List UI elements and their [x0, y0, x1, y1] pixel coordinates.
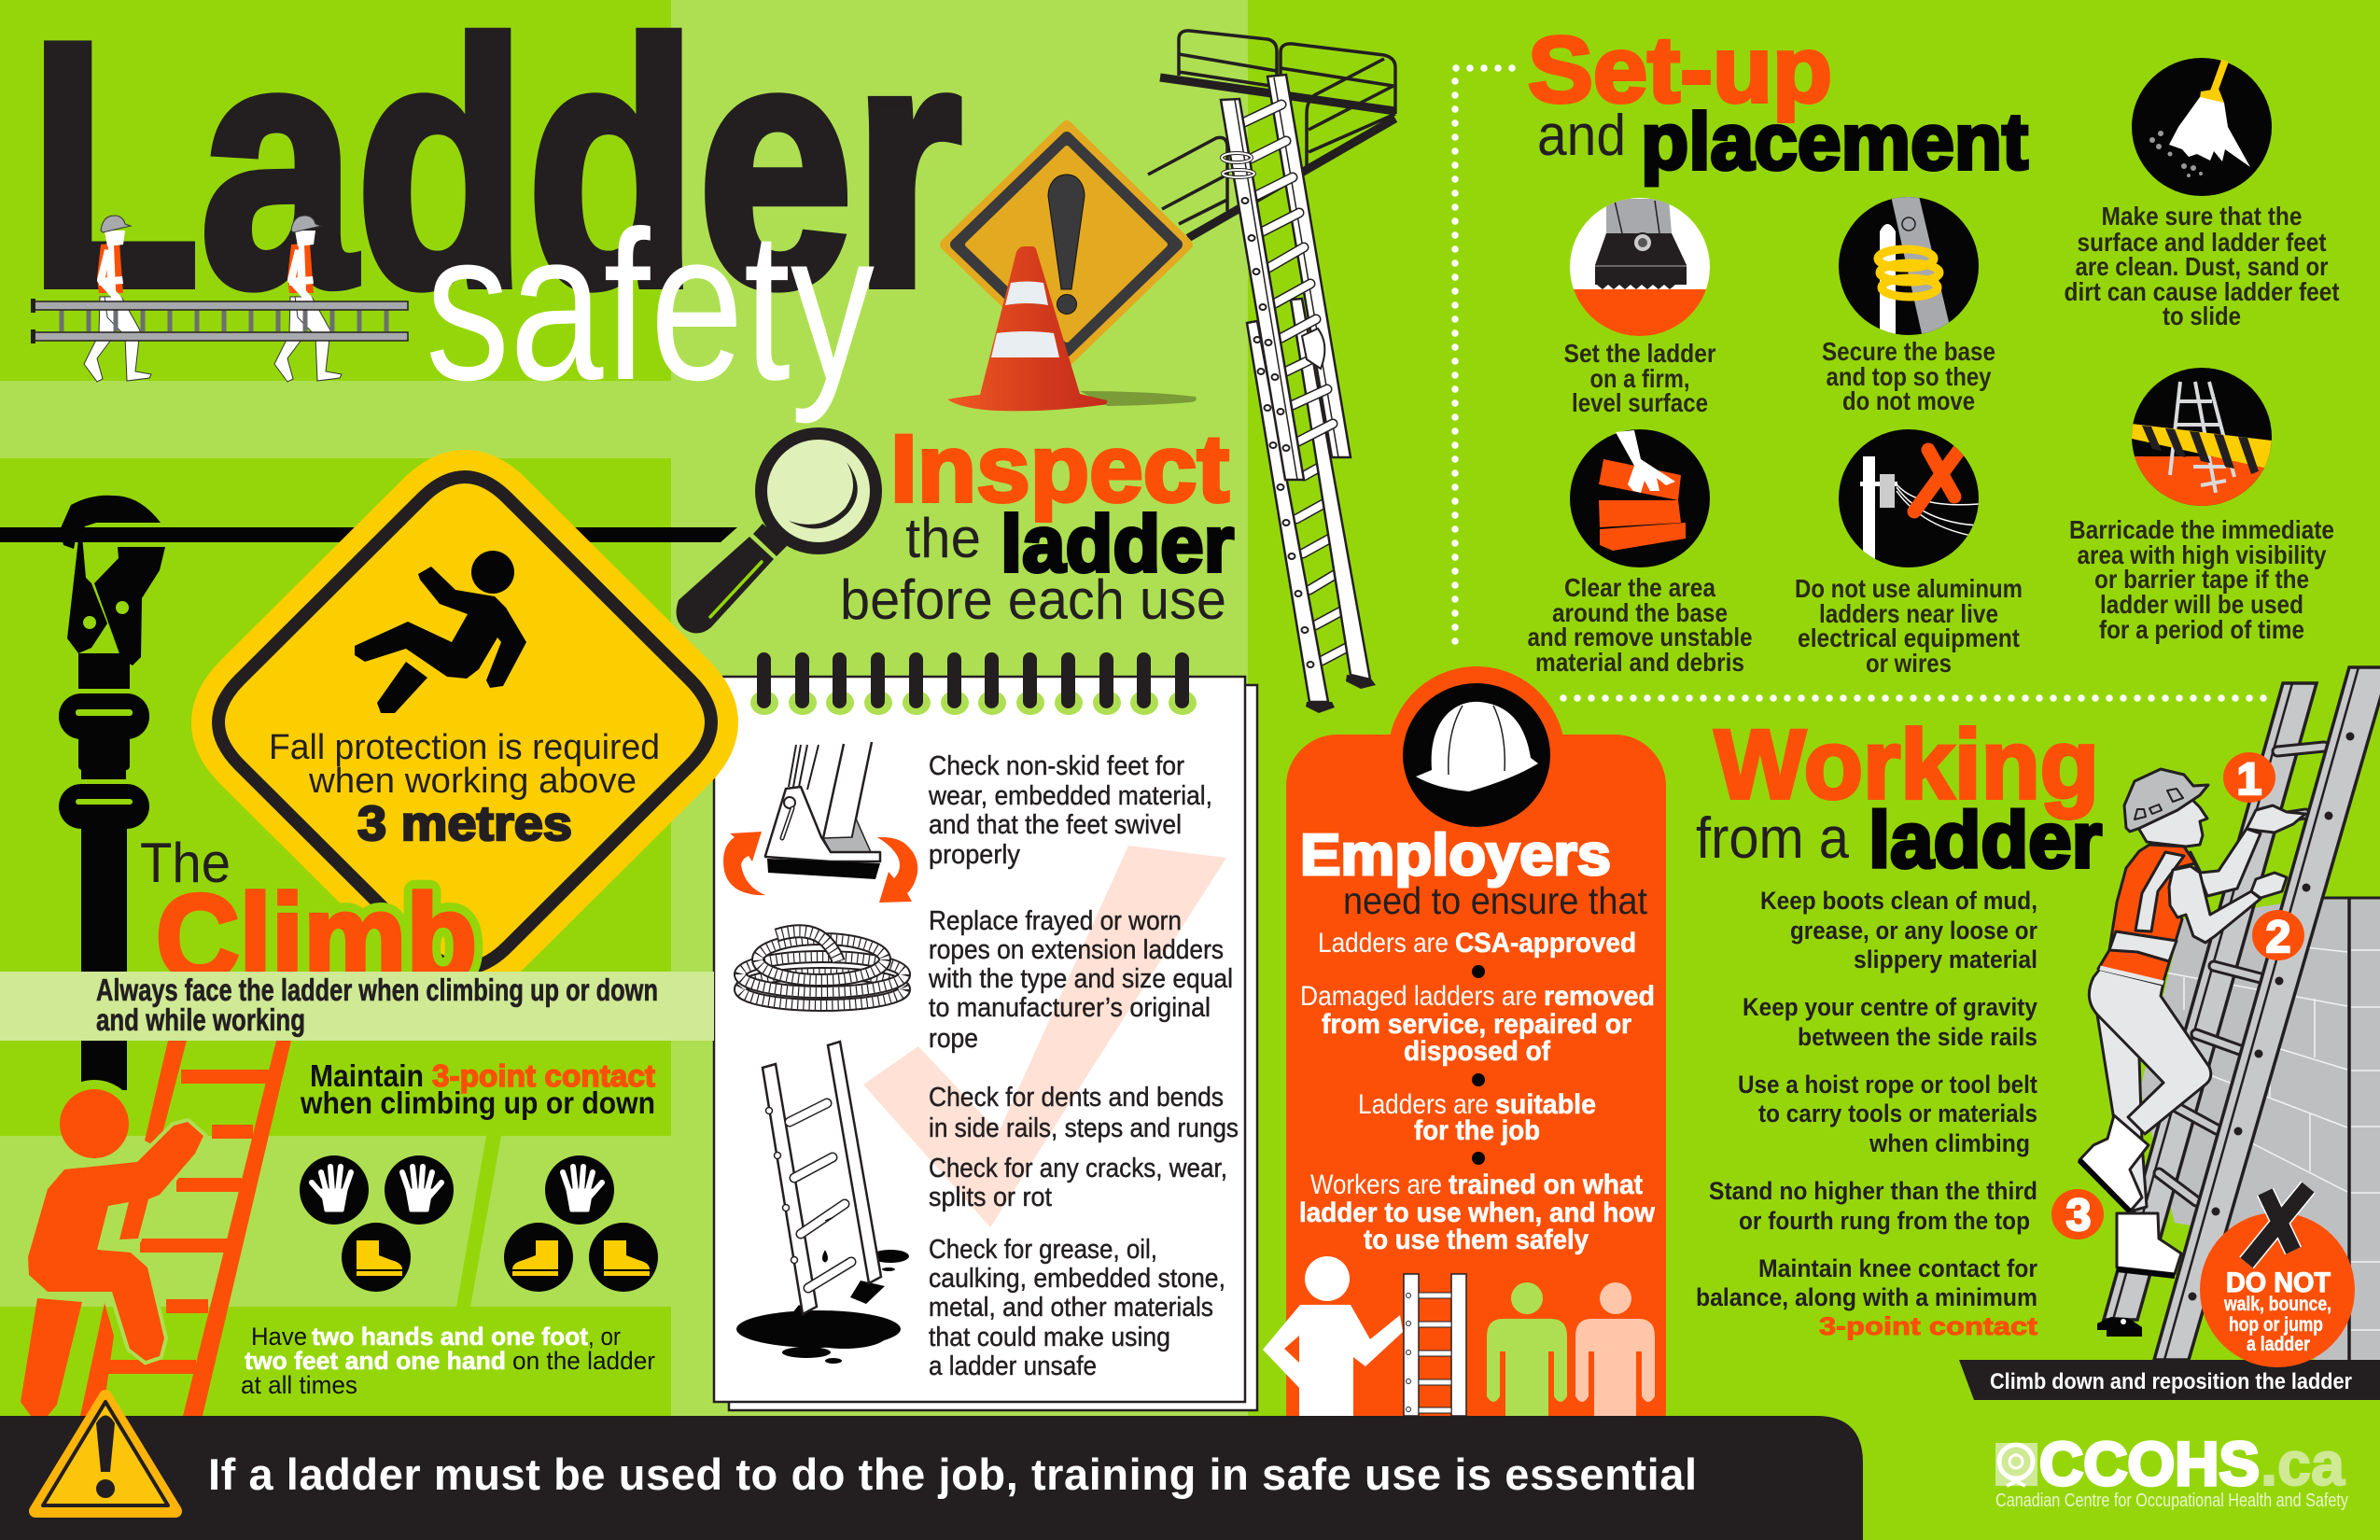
employers list: Ladders are — [1318, 928, 1449, 959]
traffic cone — [947, 246, 1197, 411]
icon: broom sweeping — [2132, 58, 2272, 196]
notebook text — [928, 751, 1239, 1381]
set-up instructions text: ladders near live — [1819, 599, 1998, 628]
heading: The Climb: Climb — [156, 869, 477, 1005]
working tips text — [1696, 887, 2037, 1340]
set-up instructions text — [1527, 202, 2339, 678]
employers list: ladder to use when, and how — [1299, 1197, 1656, 1228]
notebook text: ropes on extension ladders — [929, 935, 1224, 965]
icon: ladder in oil spill — [736, 1042, 909, 1364]
icon: no aluminum near wires — [1839, 429, 1979, 568]
heading: inspect the ladder: the — [905, 507, 981, 569]
illustration: worker climbing ladder — [2079, 667, 2380, 1360]
icon: orange climber on ladder — [21, 1041, 291, 1416]
set-up instructions text: Set the ladder — [1564, 339, 1716, 368]
warning diamond sign — [945, 126, 1187, 361]
set-up instructions text: are clean. Dust, sand or — [2076, 252, 2329, 281]
set-up instructions text: material and debris — [1535, 648, 1744, 677]
text: maintain 3-point contact: when climbing up or down — [300, 1085, 655, 1120]
heading: working from a ladder: ladder — [1869, 796, 2102, 884]
people with ladder — [1263, 1256, 1655, 1416]
set-up instructions text: for a period of time — [2099, 615, 2304, 644]
heading: employers: need to ensure that — [1343, 879, 1648, 922]
banner: climb down: Climb down and reposition the ladder — [1990, 1369, 2352, 1394]
heading: set-up and placement — [1528, 18, 2028, 187]
text: maintain 3-point contact: Maintain — [310, 1058, 424, 1093]
set-up instructions text: or wires — [1866, 649, 1952, 678]
set-up instructions text: Secure the base — [1822, 337, 1995, 366]
callout: do not: hop or jump — [2229, 1314, 2323, 1336]
band: always face the ladder — [0, 972, 714, 1041]
sign text: when working above — [308, 762, 637, 801]
set-up instructions text: dirt can cause ladder feet — [2065, 277, 2339, 306]
icon: hard hat — [1403, 683, 1550, 827]
notebook text: in side rails, steps and rungs — [929, 1113, 1239, 1143]
text: maintain 3-point contact: 3-point contact — [432, 1058, 655, 1093]
heading: working from a ladder: Working — [1715, 710, 2099, 819]
icon: clear the area — [1570, 429, 1710, 567]
text: two hands and one foot: , or — [588, 1323, 621, 1351]
dotted connector lines — [1455, 68, 2266, 698]
notebook spiral — [750, 652, 1197, 715]
callout: do not: walk, bounce, — [2223, 1294, 2331, 1315]
heading: The Climb: Climb — [156, 869, 477, 1005]
callout: do not — [2200, 1187, 2355, 1367]
set-up instructions text: Barricade the immediate — [2069, 515, 2334, 544]
harness hook and strap — [59, 496, 165, 1090]
employers list: suitable — [1495, 1089, 1596, 1120]
set-up instructions text: Do not use aluminum — [1795, 574, 2023, 603]
notebook text: and that the feet swivel — [929, 810, 1182, 840]
set-up instructions text: to slide — [2163, 301, 2241, 330]
notebook text: Check non-skid feet for — [929, 751, 1184, 781]
working tips text: balance, along with a minimum — [1696, 1283, 2037, 1311]
working tips text: Maintain knee contact for — [1758, 1254, 2037, 1282]
workers carrying ladder — [31, 216, 408, 382]
employers list: Workers are — [1310, 1169, 1442, 1200]
icon: barricade tape — [2132, 368, 2272, 506]
heading: The Climb: The — [140, 832, 231, 894]
set-up instructions text: electrical equipment — [1798, 623, 2020, 652]
magnifying glass — [677, 427, 882, 634]
notebook text: Check for grease, oil, — [929, 1235, 1157, 1265]
set-up instructions text: Make sure that the — [2102, 202, 2302, 231]
climb: panels — [0, 1136, 671, 1307]
set-up instructions text: surface and ladder feet — [2078, 228, 2326, 257]
employers list — [1299, 928, 1656, 1255]
extension ladder — [1221, 75, 1376, 713]
employers list: trained on what — [1449, 1169, 1643, 1200]
text: two hands and one foot: two feet and one hand — [245, 1347, 506, 1375]
notebook text: with the type and size equal — [928, 964, 1233, 994]
set-up instructions text: around the base — [1552, 598, 1728, 627]
employers list: CSA-approved — [1455, 928, 1636, 959]
banner text: If a ladder must be used to do the job, training in safe use is essential — [208, 1449, 1697, 1499]
set-up instructions text: area with high visibility — [2078, 540, 2327, 569]
set-up instructions text: ladder will be used — [2100, 590, 2303, 619]
heading: set-up and placement: Set-up — [1528, 18, 1832, 122]
working tips text: slippery material — [1854, 945, 2037, 973]
heading: set-up and placement: and — [1537, 104, 1626, 168]
heading: inspect the ladder: Inspect — [890, 415, 1229, 522]
number badges: 3 — [2066, 1191, 2091, 1240]
employers list: Damaged ladders are — [1300, 981, 1537, 1012]
number badges: 1 — [2237, 755, 2261, 805]
set-up instructions text: on a firm, — [1590, 364, 1689, 393]
heading: employers — [1300, 823, 1648, 922]
title: safety — [426, 188, 875, 425]
working tips text: Keep your centre of gravity — [1743, 993, 2037, 1021]
heading: inspect the ladder: ladder — [1001, 500, 1234, 589]
employers list: from service, repaired or — [1322, 1009, 1631, 1040]
icon: ladder foot with arrows — [723, 742, 917, 903]
number badges: 2 — [2266, 913, 2290, 962]
sign text: Fall protection is required — [269, 728, 660, 767]
notebook text: to manufacturer’s original — [929, 993, 1211, 1023]
notebook text: Replace frayed or worn — [929, 906, 1182, 936]
front rail — [2154, 667, 2380, 1360]
set-up instructions text: or barrier tape if the — [2094, 565, 2309, 594]
notebook — [714, 652, 1257, 1410]
logo: CCOHS: .ca — [2261, 1429, 2345, 1498]
sign text: 3 metres — [357, 797, 572, 851]
icon: coiled rope — [740, 931, 904, 1005]
employers list: Ladders are — [1358, 1089, 1489, 1120]
text: two hands and one foot: at all times — [241, 1371, 357, 1399]
set-up instructions text: and remove unstable — [1527, 623, 1753, 651]
notebook text: Check for dents and bends — [929, 1083, 1224, 1113]
notebook text: caulking, embedded stone, — [929, 1264, 1225, 1294]
working tips text: to carry tools or materials — [1758, 1099, 2037, 1127]
heading: working from a ladder — [1696, 710, 2102, 884]
notebook text: properly — [929, 840, 1020, 870]
working tips text: Stand no higher than the third — [1709, 1177, 2037, 1205]
heading: working from a ladder: from a — [1696, 806, 1849, 871]
set-up instructions text: level surface — [1572, 388, 1708, 417]
employers list: to use them safely — [1364, 1225, 1589, 1255]
text: two hands and one foot — [241, 1323, 655, 1399]
caution sign: fall protection — [218, 477, 711, 968]
safety line — [0, 527, 737, 542]
working tips text: Keep boots clean of mud, — [1760, 887, 2037, 915]
banner: climb down — [1959, 1360, 2380, 1400]
working tips text: Use a hoist rope or tool belt — [1738, 1071, 2037, 1099]
heading: set-up and placement: placement — [1641, 98, 2028, 187]
back rail and rungs — [2097, 683, 2324, 1337]
employers list: for the job — [1414, 1115, 1540, 1146]
notebook text: Check for any cracks, wear, — [929, 1154, 1227, 1183]
icon: warning triangle — [35, 1396, 175, 1511]
text: two hands and one foot: two hands and one foot — [312, 1323, 588, 1351]
platform railing — [1148, 31, 1395, 238]
icons: hands and feet — [300, 1155, 658, 1292]
working tips text: when climbing — [1869, 1129, 2030, 1157]
notebook text: that could make using — [929, 1323, 1170, 1352]
set-up instructions text: and top so they — [1826, 362, 1992, 391]
heading: inspect the ladder — [840, 415, 1234, 631]
notebook text: a ladder unsafe — [929, 1351, 1097, 1381]
icon: secure base and top — [1839, 196, 1979, 338]
callout: do not: a ladder — [2247, 1334, 2310, 1355]
employers list: removed — [1544, 981, 1655, 1012]
text: two hands and one foot: on the ladder — [512, 1347, 655, 1375]
text: two hands and one foot: Have — [251, 1323, 307, 1351]
working tips text: grease, or any loose or — [1790, 917, 2037, 945]
band: always face the ladder: and while working — [96, 1002, 305, 1037]
notebook text: metal, and other materials — [929, 1293, 1213, 1323]
working tips text: or fourth rung from the top — [1739, 1207, 2030, 1235]
working tips text: between the side rails — [1798, 1023, 2037, 1051]
set-up instructions text: Clear the area — [1564, 573, 1715, 602]
number badges — [2051, 752, 2304, 1240]
heading: inspect the ladder: before each use — [840, 568, 1226, 631]
notebook text: splits or rot — [929, 1183, 1052, 1212]
worker figure — [2079, 769, 2305, 1276]
notebook text: wear, embedded material, — [928, 781, 1212, 811]
logo: CCOHS: CCOHS — [2039, 1429, 2260, 1498]
set-up instructions text: do not move — [1842, 386, 1975, 415]
heading: employers: Employers — [1300, 823, 1611, 888]
sign text — [269, 728, 660, 851]
wall — [2140, 898, 2380, 1360]
icon: firm level surface — [1570, 198, 1710, 336]
text: maintain 3-point contact — [300, 1058, 655, 1120]
notebook text: rope — [929, 1024, 978, 1054]
band: always face the ladder: Always face the ladder when climbing up or down — [96, 973, 658, 1007]
logo: CCOHS — [1995, 1429, 2348, 1511]
panel: employers — [1263, 666, 1666, 1463]
pale check mark — [863, 846, 1226, 1227]
employers list: disposed of — [1404, 1036, 1551, 1067]
callout: do not: DO NOT — [2226, 1267, 2331, 1298]
bottom banner — [0, 1396, 1863, 1540]
icon: falling person — [355, 551, 526, 713]
working tips text: 3-point contact — [1819, 1312, 2037, 1340]
